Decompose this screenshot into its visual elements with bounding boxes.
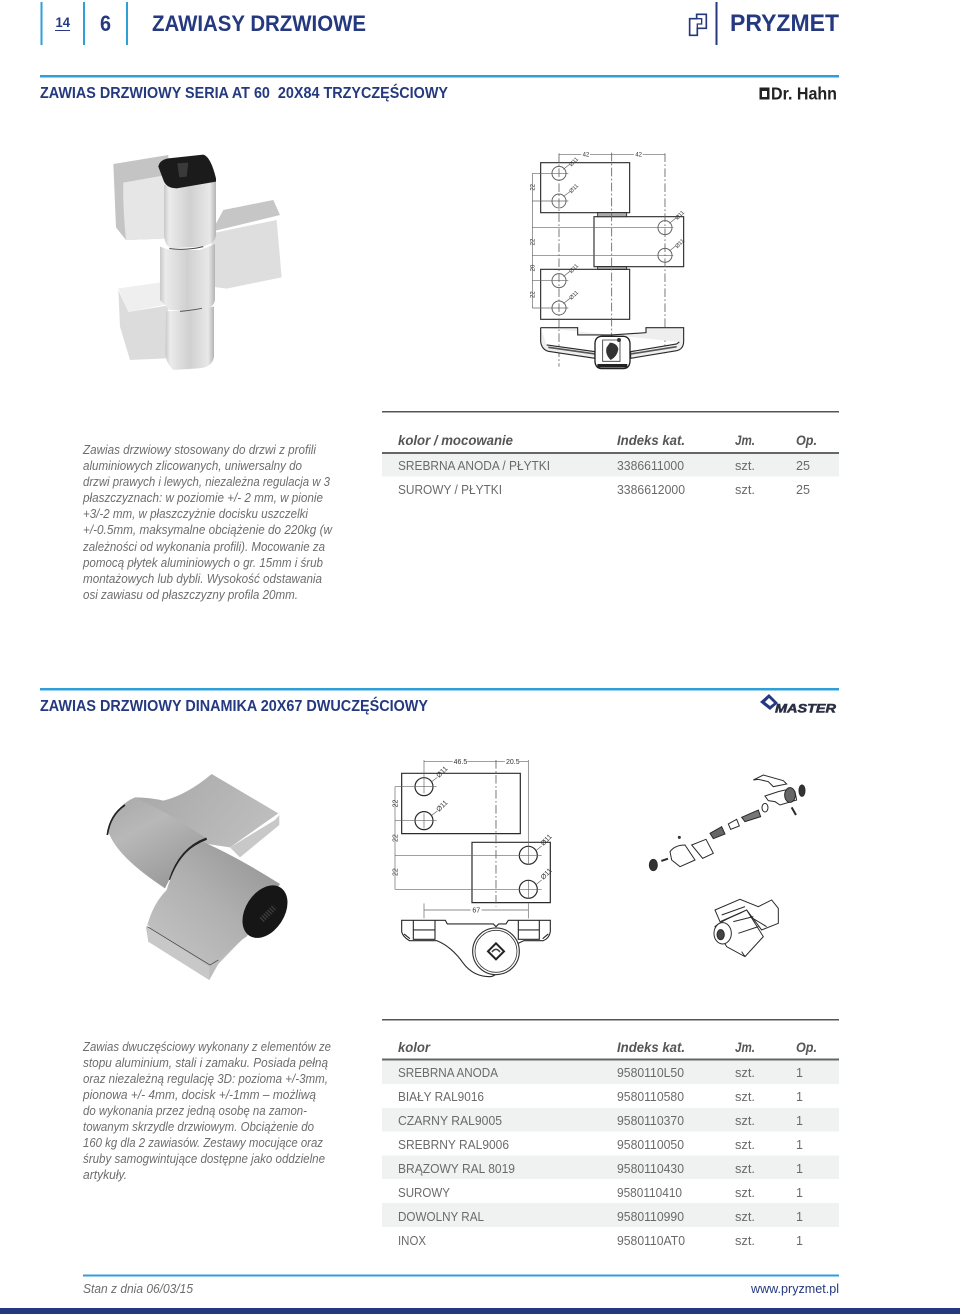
description: Dinamika: pionowa +/- 4mm, docisk +/-1mm – możliwą — [82, 1088, 316, 1102]
table: Dinamika: SREBRNA ANODA — [398, 1066, 499, 1080]
technical drawing: two-part hinge — [392, 759, 554, 977]
logo: Master — [760, 694, 837, 716]
table: AT 60: szt. — [735, 483, 755, 497]
page number: 14 — [56, 15, 70, 30]
table: Dinamika: 1 — [796, 1138, 803, 1152]
technical drawing: two-part hinge: Ø11 — [540, 833, 554, 847]
table: Dinamika: 1 — [796, 1162, 803, 1176]
table: Dinamika: 9580110580 — [617, 1090, 684, 1104]
table: AT 60: 25 — [796, 483, 810, 497]
footer — [0, 1274, 960, 1314]
technical drawing: three-part hinge: Ø11 — [568, 183, 580, 195]
table: Dinamika: SUROWY — [398, 1186, 451, 1200]
table: Dinamika: CZARNY RAL9005 — [398, 1114, 502, 1128]
photo: two-part hinge — [107, 774, 297, 980]
table: Dinamika: 9580110AT0 — [617, 1234, 685, 1248]
technical drawing: three-part hinge: 20 — [530, 264, 536, 271]
description: Dinamika: artykuły. — [83, 1168, 127, 1182]
table: Dinamika: DOWOLNY RAL — [398, 1210, 484, 1224]
table: AT 60: Op. — [796, 432, 817, 448]
description: AT 60: pomocą płytek aluminiowych o gr. 15mm i śrub — [82, 556, 323, 570]
description: Dinamika — [82, 1040, 331, 1182]
table: Dinamika: 1 — [796, 1066, 803, 1080]
technical drawing: three-part hinge: 22 — [530, 291, 536, 298]
table: Dinamika: szt. — [735, 1162, 755, 1176]
table: Dinamika: 9580110410 — [617, 1186, 682, 1200]
brand divider — [716, 2, 718, 45]
table: Dinamika: 1 — [796, 1234, 803, 1248]
footer: www.pryzmet.pl — [750, 1281, 839, 1296]
table: AT 60: SREBRNA ANODA / PŁYTKI — [398, 459, 550, 473]
technical drawing: two-part hinge: 20.5 — [506, 759, 520, 766]
section number: 6 — [100, 11, 111, 36]
table: Dinamika: szt. — [735, 1114, 755, 1128]
exploded parts — [649, 775, 805, 871]
technical drawing: two-part hinge: 22 — [392, 868, 399, 876]
description: AT 60: osi zawiasu od płaszczyzny profila 20mm. — [83, 588, 298, 602]
description: Dinamika: śruby samogwintujące dostępne jako oddzielne — [83, 1152, 325, 1166]
assembled hinge — [714, 899, 778, 957]
table: Dinamika: 9580110430 — [617, 1162, 684, 1176]
table: Dinamika: Indeks kat. — [617, 1039, 685, 1055]
table: Dinamika: kolor — [398, 1039, 431, 1055]
technical drawing: three-part hinge: 42 — [583, 152, 590, 158]
table: Dinamika: BRĄZOWY RAL 8019 — [398, 1162, 515, 1176]
table: Dinamika: szt. — [735, 1234, 755, 1248]
logo: Dr. Hahn: Dr. Hahn — [771, 84, 837, 104]
table: Dinamika: SREBRNY RAL9006 — [398, 1138, 509, 1152]
technical drawing: three-part hinge: 22 — [530, 183, 536, 191]
description: Dinamika: do wykonania przez jedną osobę na zamon- — [83, 1104, 307, 1118]
table: AT 60: 3386611000 — [617, 459, 684, 473]
technical drawing: two-part hinge: Ø11 — [435, 799, 449, 813]
technical drawing: three-part hinge: Ø11 — [674, 238, 686, 250]
description: AT 60: aluminiowych zlicowanych, uniwersalny do — [83, 459, 302, 473]
table: Dinamika: szt. — [735, 1186, 755, 1200]
description: AT 60: Zawias drzwiowy stosowany do drzwi z profili — [82, 443, 317, 457]
table: Dinamika: szt. — [735, 1210, 755, 1224]
description: Dinamika: oraz niezależną regulację 3D: pozioma +/-3mm, — [83, 1072, 328, 1086]
technical drawing: two-part hinge: 46.5 — [454, 759, 467, 766]
technical drawing: three-part hinge: Ø11 — [568, 263, 580, 275]
table: Dinamika: 1 — [796, 1186, 803, 1200]
table: Dinamika: 9580110370 — [617, 1114, 684, 1128]
table: Dinamika — [382, 1019, 839, 1248]
description: AT 60: drzwi prawych i lewych, niezależna regulacja w 3 — [83, 475, 330, 489]
description: AT 60: zależności od wykonania profili). Mocowanie za — [82, 540, 325, 554]
technical drawing: two-part hinge: 22 — [392, 834, 399, 842]
description: Dinamika: towanym skrzydle drzwiowym. Obciążenie do — [83, 1120, 314, 1134]
footer: Stan z dnia 06/03/15 — [83, 1282, 193, 1296]
technical drawing: two-part hinge: Ø11 — [435, 765, 449, 779]
description: Dinamika: Zawias dwuczęściowy wykonany z elementów ze — [82, 1040, 331, 1054]
table: AT 60: 25 — [796, 459, 810, 473]
description: Dinamika: stopu aluminium, stali i zamaku. Posiada pełną — [83, 1056, 328, 1070]
table: Dinamika: 1 — [796, 1114, 803, 1128]
table: Dinamika: INOX — [398, 1234, 427, 1248]
technical drawing: three-part hinge: Ø11 — [674, 210, 686, 221]
table: AT 60: kolor / mocowanie — [398, 432, 513, 448]
table: Dinamika: BIAŁY RAL9016 — [398, 1090, 484, 1104]
table: Dinamika: 9580110L50 — [617, 1066, 684, 1080]
table: AT 60: SUROWY / PŁYTKI — [398, 483, 502, 497]
section title: ZAWIASY DRZWIOWE — [152, 11, 366, 36]
table: Dinamika: 1 — [796, 1090, 803, 1104]
product heading: Dinamika: ZAWIAS DRZWIOWY DINAMIKA 20X67 DWUCZĘŚCIOWY — [40, 696, 428, 715]
table: AT 60: Indeks kat. — [617, 432, 685, 448]
table: AT 60 — [382, 411, 839, 497]
description: AT 60: płaszczyznach: w poziomie +/- 2 mm, w pionie — [82, 491, 323, 505]
table: Dinamika: Op. — [796, 1039, 817, 1055]
table: Dinamika: 9580110990 — [617, 1210, 684, 1224]
product heading: AT 60: ZAWIAS DRZWIOWY SERIA AT 60 20X84 TRZYCZĘŚCIOWY — [40, 83, 448, 102]
table: AT 60: szt. — [735, 459, 755, 473]
technical drawing: three-part hinge: 42 — [635, 152, 643, 158]
icon: Pryzmet logo mark — [690, 14, 706, 35]
table: Dinamika: szt. — [735, 1066, 755, 1080]
description: Dinamika: 160 kg dla 2 zawiasów. Zestawy mocujące oraz — [83, 1136, 324, 1150]
technical drawing: three-part hinge: 22 — [530, 238, 536, 245]
table: AT 60: Jm. — [735, 432, 755, 448]
table: Dinamika: szt. — [735, 1138, 755, 1152]
technical drawing: two-part hinge: 22 — [392, 799, 399, 807]
description: AT 60: montażowych lub dybli. Wysokość odstawania — [83, 572, 322, 586]
table: Dinamika: Jm. — [735, 1039, 755, 1055]
table: Dinamika: szt. — [735, 1090, 755, 1104]
table: Dinamika: 1 — [796, 1210, 803, 1224]
brand name: PRYZMET — [730, 10, 839, 37]
technical drawing: two-part hinge: Ø11 — [540, 867, 554, 881]
technical drawing: three-part hinge: Ø11 — [568, 157, 580, 168]
exploded view and assembled hinge — [649, 775, 805, 957]
technical drawing: three-part hinge: Ø11 — [568, 290, 580, 301]
technical drawing: three-part hinge — [530, 152, 686, 369]
table: AT 60: 3386612000 — [617, 483, 685, 497]
photo: three-part hinge — [113, 155, 282, 370]
description: AT 60 — [82, 443, 333, 602]
technical drawing: two-part hinge: 67 — [472, 908, 480, 915]
page header — [40, 2, 839, 45]
description: AT 60: +3/-2 mm, w płaszczyżnie docisku uszczelki — [83, 507, 309, 521]
description: AT 60: +/-0.5mm, maksymalne obciążenie do 220kg (w — [83, 523, 333, 537]
logo: Master: MASTER — [775, 704, 837, 716]
table: Dinamika: 9580110050 — [617, 1138, 684, 1152]
header dividers — [40, 2, 128, 45]
